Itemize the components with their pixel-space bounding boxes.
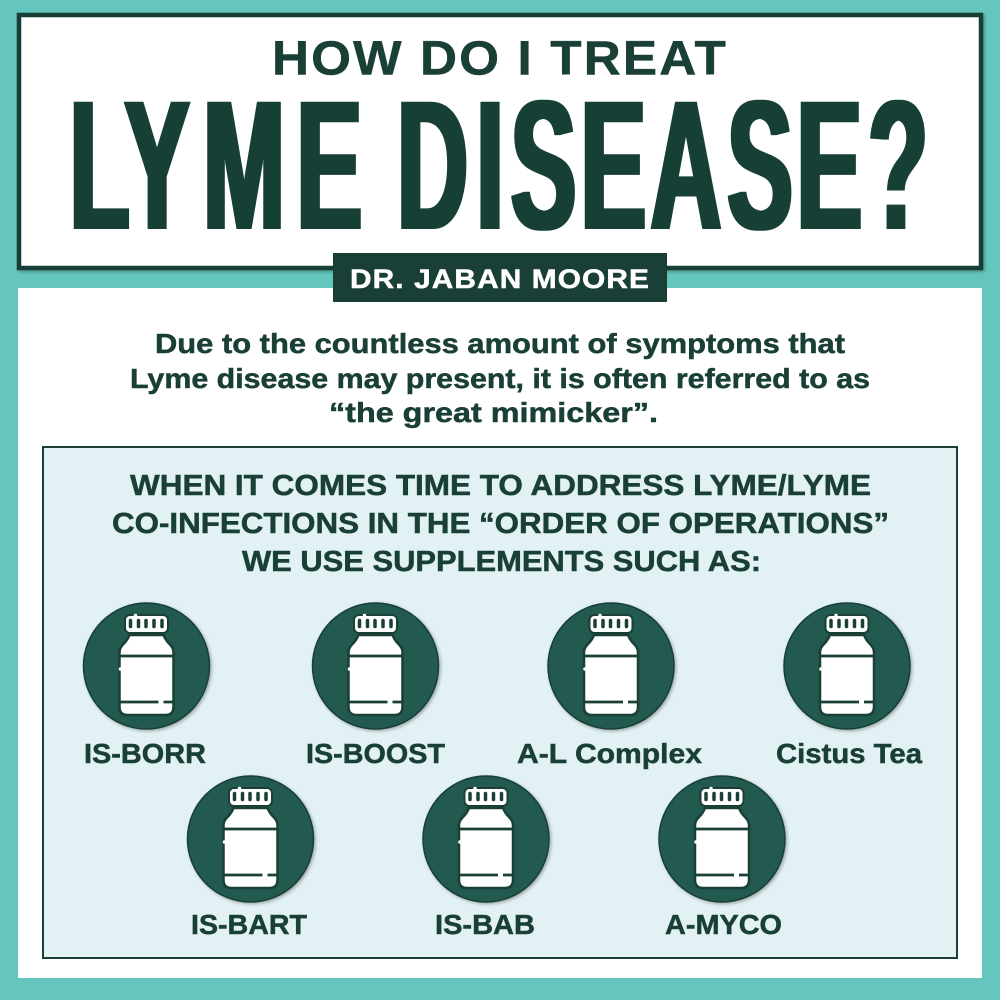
heading: how do I treat: HOW DO I TREAT <box>272 32 728 86</box>
supplements panel <box>43 447 957 958</box>
supplement: Cistus Tea: Cistus Tea <box>776 738 922 769</box>
panel heading: WE USE SUPPLEMENTS SUCH AS: <box>242 546 761 578</box>
supplement: IS-BART: IS-BART <box>191 909 307 940</box>
supplement: IS-BART <box>188 776 314 940</box>
intro paragraph: “the great mimicker”. <box>329 397 658 428</box>
header panel <box>19 15 981 268</box>
intro paragraph <box>130 328 870 428</box>
supplement: A-L Complex: A-L Complex <box>517 738 702 769</box>
title: Lyme Disease: LYME DISEASE? <box>70 63 928 269</box>
main white panel <box>18 288 982 978</box>
supplement: IS-BAB <box>423 776 549 940</box>
intro paragraph: Due to the countless amount of symptoms that <box>155 328 845 359</box>
supplement: IS-BORR: IS-BORR <box>84 738 206 769</box>
supplement: IS-BORR <box>84 603 210 769</box>
panel heading: CO-INFECTIONS IN THE “ORDER OF OPERATIONS” <box>112 508 889 540</box>
supplement: Cistus Tea <box>776 603 922 769</box>
supplement: IS-BOOST <box>306 603 445 769</box>
supplement: A-MYCO <box>659 776 785 940</box>
panel heading <box>112 470 889 578</box>
supplement: IS-BAB: IS-BAB <box>435 909 535 940</box>
supplement: A-MYCO: A-MYCO <box>665 909 782 940</box>
author name: DR. JABAN MOORE <box>350 264 650 294</box>
intro paragraph: Lyme disease may present, it is often referred to as <box>130 363 870 394</box>
author badge <box>333 253 667 302</box>
supplement: IS-BOOST: IS-BOOST <box>306 738 445 769</box>
supplement: A-L Complex <box>517 603 702 769</box>
panel heading: WHEN IT COMES TIME TO ADDRESS LYME/LYME <box>130 470 871 502</box>
